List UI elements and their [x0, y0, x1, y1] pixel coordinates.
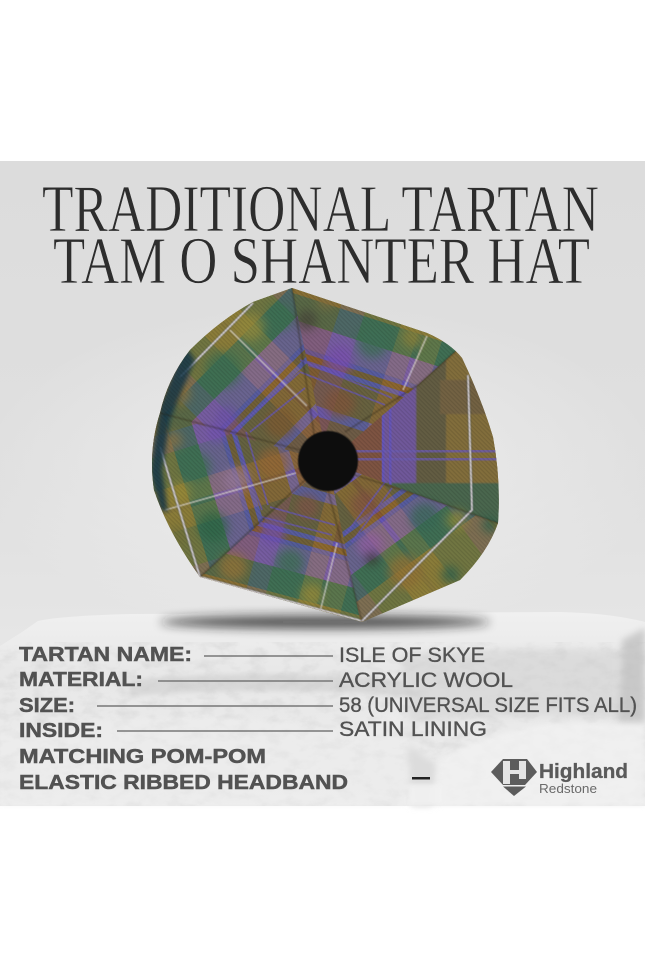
panel: left [152, 413, 306, 577]
logo subtitle: Redstone [539, 781, 597, 796]
white trim line [160, 303, 472, 621]
tartan hat [152, 288, 499, 622]
background panel [0, 161, 645, 806]
spec: tartan name [19, 644, 485, 667]
spec: size: 58 (UNIVERSAL SIZE FITS ALL) [339, 694, 637, 717]
panel: bottom [200, 482, 360, 621]
spec: inside: INSIDE: [19, 720, 103, 742]
colour patches [164, 291, 498, 606]
rock platform [0, 612, 645, 806]
panel: top right [292, 288, 456, 442]
panel: right [352, 351, 499, 523]
panel: lower right [334, 472, 498, 622]
icon: logo diamond [491, 759, 537, 796]
icon: pom-pom [298, 431, 358, 491]
spec: material [19, 669, 513, 692]
seams [160, 288, 498, 622]
infographic canvas [0, 161, 645, 808]
hat shadow [160, 615, 490, 629]
specifications list [19, 644, 637, 794]
panel: top left [160, 288, 322, 453]
fabric weave [152, 288, 498, 622]
spec: tartan name: ISLE OF SKYE [339, 644, 485, 667]
logo: Highland Redstone [491, 759, 628, 796]
logo wordmark: Highland [539, 761, 628, 783]
title [42, 172, 599, 298]
purple check lines [232, 360, 392, 542]
hat base [152, 288, 499, 620]
spec: inside: SATIN LINING [339, 718, 487, 741]
spec: tartan name: TARTAN NAME: [19, 644, 192, 666]
spec: size [19, 694, 637, 717]
feature: elastic ribbed headband: ELASTIC RIBBED HEADBAND [19, 772, 348, 794]
feature: matching pom-pom: MATCHING POM-POM [19, 746, 266, 768]
spec: material: ACRYLIC WOOL [339, 669, 513, 692]
spec: material: MATERIAL: [19, 669, 143, 691]
dark left edge [150, 345, 195, 512]
spec: size: SIZE: [19, 695, 75, 717]
spec: inside [19, 718, 487, 742]
muted fabric tone [153, 288, 498, 620]
radial white stripes [165, 330, 427, 612]
